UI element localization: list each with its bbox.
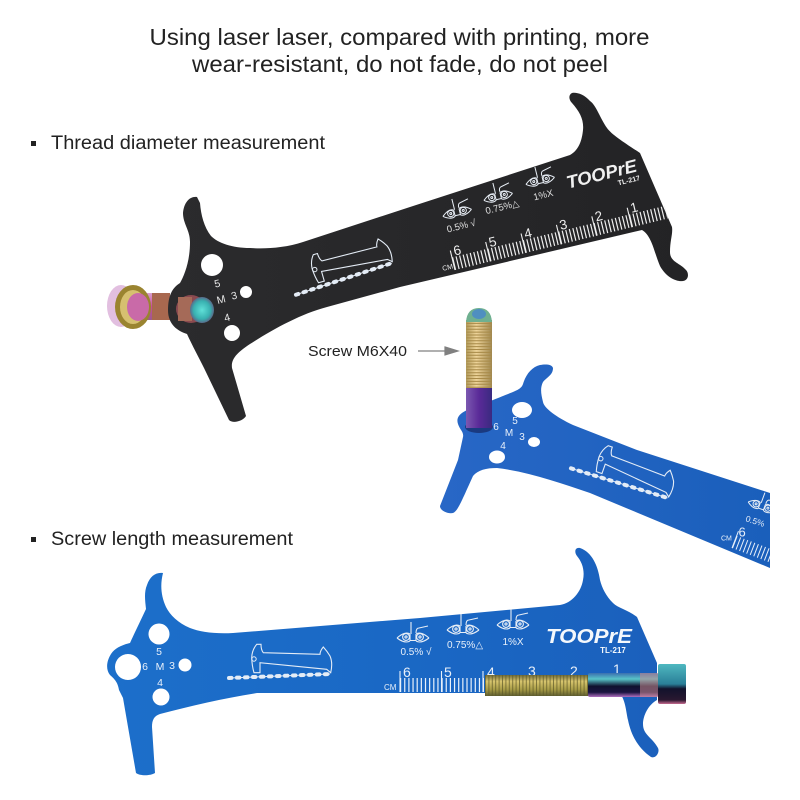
screw callout label — [308, 344, 458, 360]
blue tool hole labels: 5 — [512, 416, 518, 427]
ruler: bottom tool: 2 — [570, 663, 578, 679]
blue tool body — [440, 364, 770, 568]
blue tool hole labels: 3 — [519, 432, 525, 443]
blue tool hole labels: 6 — [493, 422, 499, 433]
ruler: bottom tool: 4 — [487, 664, 495, 680]
brand logo: bottom tool: TL-217 — [600, 646, 626, 655]
blue tool hole labels — [493, 416, 525, 452]
wear icons: black tool: 0.5% √ — [446, 217, 478, 235]
wear icons: bottom tool: 0.5% √ — [400, 646, 432, 658]
black tool hole labels — [213, 278, 239, 325]
wear icons: black tool — [439, 163, 555, 235]
ruler: bottom tool: 5 — [444, 664, 452, 680]
ruler: middle tool, clipped — [721, 492, 770, 562]
blue tool hole labels: 4 — [157, 677, 163, 689]
ruler: bottom tool: 3 — [528, 663, 536, 679]
blue tool hole labels: 4 — [500, 441, 506, 452]
brand logo: black tool: TOOPrE — [564, 156, 640, 193]
brand logo: bottom tool — [546, 626, 633, 655]
ruler: bottom tool — [384, 661, 621, 692]
ruler: black tool: CM — [442, 263, 454, 273]
black tool hole labels: M — [216, 293, 227, 307]
black gauge tool — [107, 93, 688, 422]
ruler: black tool: 2 — [593, 208, 604, 224]
ruler: black tool: 6 — [452, 242, 463, 259]
blue tool body — [107, 548, 659, 775]
ruler: middle tool, clipped: 6 — [739, 525, 746, 540]
black tool hole labels: 3 — [230, 290, 239, 303]
wear icons: bottom tool: 1%X — [502, 637, 524, 648]
ruler: black tool: 5 — [487, 234, 498, 250]
brand logo: bottom tool: TOOPrE — [546, 626, 633, 648]
heading: Using laser laser, compared with printing, more — [150, 24, 650, 50]
blue tool hole labels: M — [505, 428, 513, 439]
blue gauge tool: middle — [440, 308, 798, 570]
ruler: black tool: 1 — [629, 199, 640, 216]
ruler: bottom tool: 1 — [613, 661, 621, 677]
ruler: middle tool, clipped: CM — [721, 536, 732, 543]
black tool hole labels: 4 — [223, 312, 232, 325]
blue gauge tool: bottom — [107, 548, 686, 775]
screw head behind black tool — [107, 285, 170, 329]
blue tool hole labels: 3 — [169, 660, 175, 672]
arrow — [418, 347, 458, 355]
black tool hole labels: 5 — [213, 278, 222, 291]
wear icons: bottom tool: 0.75%△ — [447, 640, 483, 651]
blue tool hole labels — [142, 646, 175, 689]
blue tool hole labels: M — [156, 661, 164, 673]
blue tool hole labels: 6 — [142, 661, 148, 673]
ruler: black tool: 4 — [523, 225, 534, 241]
ruler: middle tool, clipped: 0.5% — [744, 513, 766, 529]
ruler: bottom tool: CM — [384, 683, 397, 692]
vertical screw — [465, 308, 493, 433]
icon: chain and gauge — [229, 644, 332, 678]
heading — [150, 24, 650, 77]
wear icons: black tool: 0.75%△ — [484, 198, 521, 217]
screw tip through black tool — [176, 295, 214, 323]
icon: chain and gauge — [287, 234, 395, 295]
ruler: black tool — [437, 193, 668, 273]
screw callout label: Screw M6X40 — [308, 344, 407, 360]
bullet label: screw length: Screw length measurement — [51, 529, 294, 550]
bullet label: thread diameter: Thread diameter measurement — [51, 133, 326, 154]
wear icons: bottom tool — [397, 609, 529, 658]
brand logo: black tool: TL-217 — [617, 175, 641, 187]
blue tool hole labels: 5 — [156, 646, 162, 658]
horizontal screw — [485, 664, 686, 704]
heading: wear-resistant, do not fade, do not peel — [191, 51, 608, 77]
icon: chain and gauge — [571, 437, 679, 502]
black tool body — [168, 93, 688, 422]
ruler: black tool: 3 — [558, 217, 569, 233]
wear icons: black tool: 1%X — [532, 188, 555, 203]
ruler: bottom tool: 6 — [403, 664, 411, 680]
